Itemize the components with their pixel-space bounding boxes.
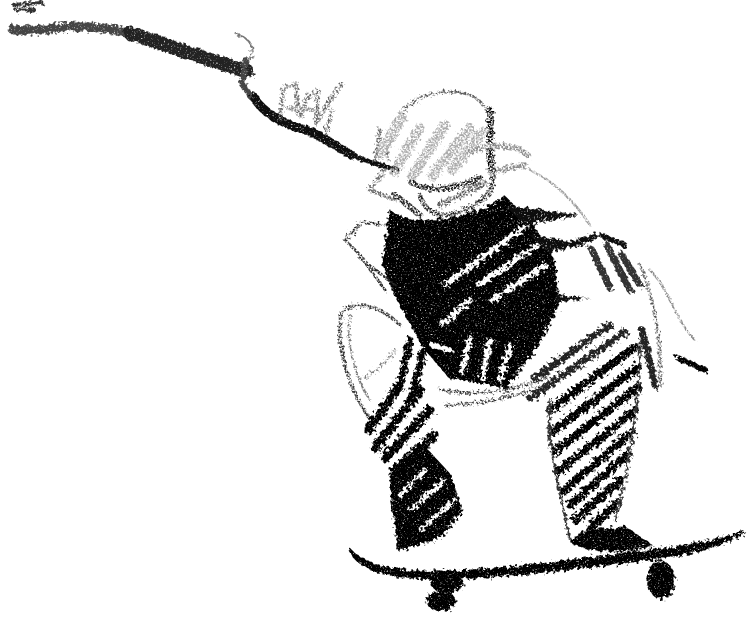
- left shin hatching: [368, 340, 435, 465]
- left leg and knee: [340, 305, 550, 425]
- right leg: [530, 325, 650, 550]
- far arm outlines: [530, 170, 695, 385]
- extended arm: [12, 3, 396, 169]
- near hand and forearm: [345, 222, 395, 290]
- torso: [385, 200, 590, 385]
- left shoe: [392, 450, 460, 548]
- hand: [280, 84, 342, 132]
- head and helmet: [370, 92, 528, 215]
- skateboard: [350, 532, 745, 611]
- far arm sleeve: [550, 235, 705, 385]
- wheels: [426, 561, 675, 611]
